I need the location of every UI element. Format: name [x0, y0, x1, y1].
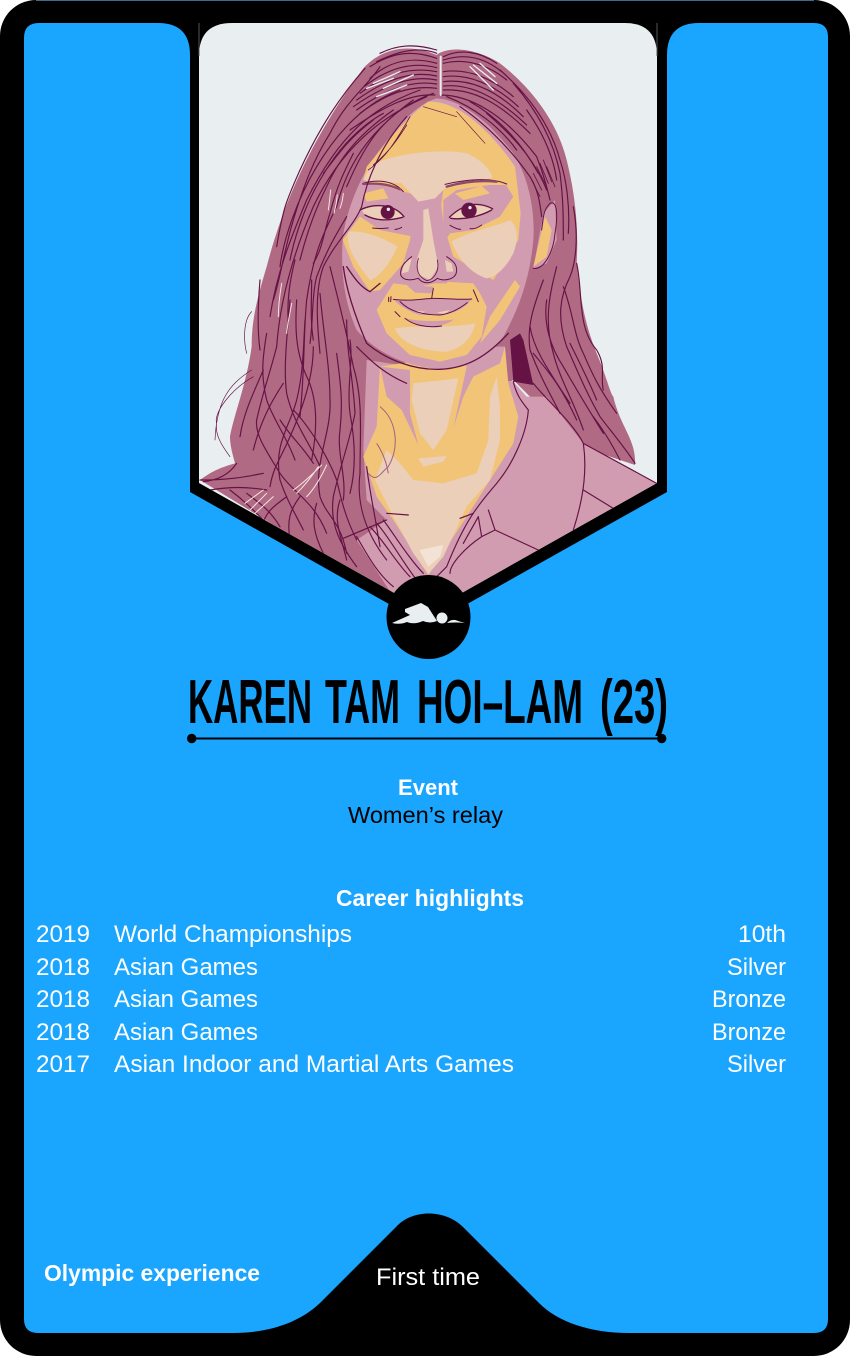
- shirt collar lines: [437, 382, 657, 577]
- neck center highlight: [412, 378, 458, 467]
- shirt: [357, 360, 656, 593]
- career highlights table: Silver: [727, 954, 786, 981]
- icon: swimmer: [392, 603, 465, 624]
- career highlights table: 2018: [36, 954, 90, 981]
- olympic experience label: Olympic experience: [44, 1260, 260, 1286]
- name heading: (23): [600, 668, 668, 737]
- right cheek highlight: [452, 220, 517, 278]
- face base: [342, 98, 534, 369]
- career highlights table: Bronze: [712, 1019, 786, 1046]
- career highlights table: World Championships: [114, 921, 352, 948]
- face lines: [343, 107, 557, 369]
- career highlights table: [36, 921, 786, 1078]
- olympic experience value: First time: [376, 1264, 480, 1291]
- neck shadows: [380, 347, 505, 445]
- swimmer badge: [386, 575, 470, 659]
- career highlights table: 2017: [36, 1051, 90, 1078]
- nose highlight: [402, 208, 453, 280]
- career highlights table: Asian Indoor and Martial Arts Games: [114, 1051, 514, 1078]
- eye area shadow: [357, 185, 513, 293]
- career highlights table: Silver: [727, 1051, 786, 1078]
- face yellow tones: [343, 102, 521, 362]
- name underline: [187, 734, 666, 743]
- career highlights table: Asian Games: [114, 1019, 258, 1046]
- neck highlight: [375, 377, 500, 574]
- eyelid yellow: [363, 186, 490, 202]
- eyes: [362, 203, 492, 220]
- hair: [200, 48, 635, 600]
- thin panel edge lines: [199, 23, 657, 56]
- left cheek highlight: [348, 231, 397, 280]
- neck: [363, 347, 518, 575]
- portrait panel: [199, 23, 657, 633]
- name heading: TAM: [325, 668, 400, 737]
- chest highlight: [419, 545, 443, 567]
- event label: Event: [398, 775, 459, 800]
- career highlights table: 10th: [738, 921, 786, 948]
- name heading: KAREN: [188, 668, 312, 737]
- career highlights table: 2019: [36, 921, 90, 948]
- neck hair wisps: [368, 407, 395, 478]
- event value: Women’s relay: [348, 802, 504, 828]
- forehead highlight: [363, 151, 492, 202]
- hair shadow behind neck: [510, 333, 533, 385]
- hair highlights: [245, 57, 497, 513]
- career highlights table: 2018: [36, 986, 90, 1013]
- name heading: [188, 668, 668, 737]
- career highlights table: Asian Games: [114, 986, 258, 1013]
- name heading: HOI–LAM: [417, 668, 583, 737]
- lips: [393, 299, 472, 327]
- career highlights table: Bronze: [712, 986, 786, 1013]
- career highlights heading: Career highlights: [336, 885, 524, 911]
- chin highlight: [395, 323, 475, 352]
- ear: [533, 200, 557, 268]
- career highlights table: 2018: [36, 1019, 90, 1046]
- career highlights table: Asian Games: [114, 954, 258, 981]
- hair strands: [200, 46, 635, 587]
